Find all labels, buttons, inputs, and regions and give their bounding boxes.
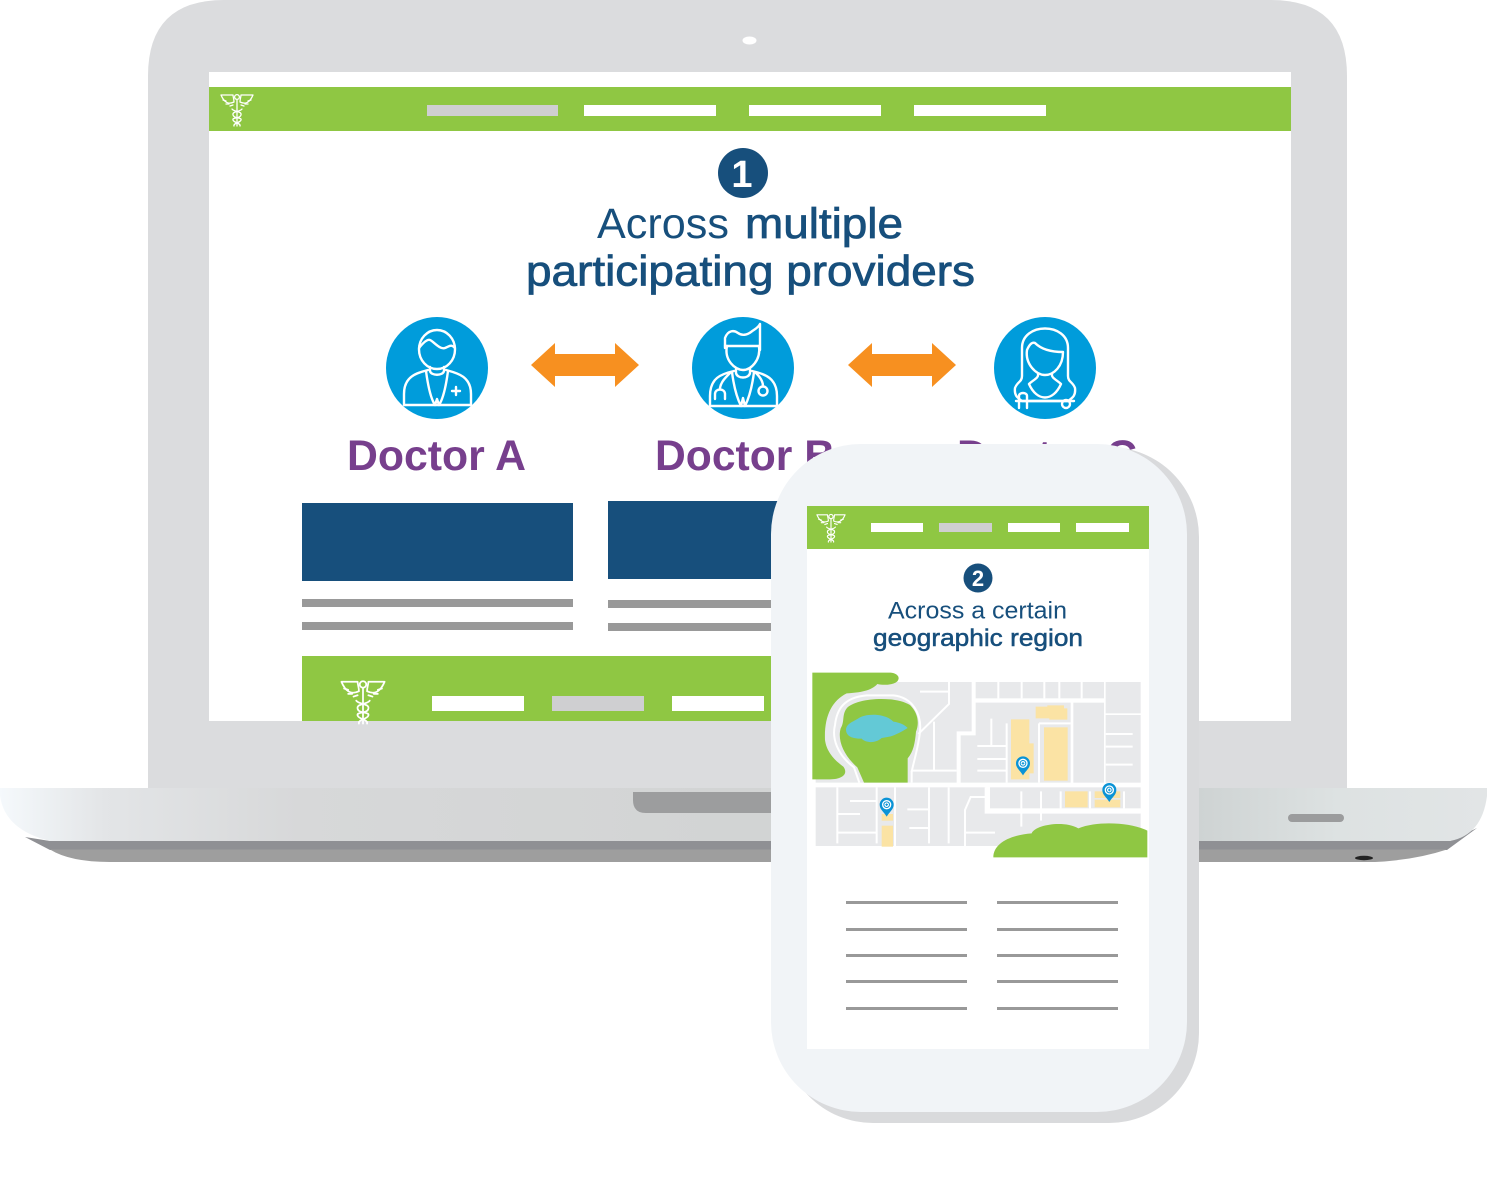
card: doctor A	[302, 503, 573, 630]
heading: across multiple participating providers: Across	[597, 200, 729, 248]
park: northwest	[812, 673, 899, 779]
base top	[0, 788, 1487, 841]
arrow: B to C	[848, 343, 956, 387]
doctor A icon	[386, 317, 488, 419]
phone site header bar	[807, 506, 1149, 549]
doctor labels: Doctor C	[957, 432, 1137, 480]
arrow: A to B	[531, 343, 639, 387]
number badge 2: 2	[972, 566, 984, 591]
map pin 2	[1102, 783, 1116, 802]
desktop site header bar	[209, 87, 1291, 131]
desktop site footer	[302, 656, 1182, 724]
doctor labels: Doctor A	[347, 432, 526, 480]
heading: across a certain geographic region: geographic region	[873, 625, 1083, 652]
map streets	[834, 682, 1141, 846]
footer logo	[341, 681, 385, 724]
map blocks	[816, 682, 1141, 846]
listing lines: left column	[846, 901, 967, 1010]
phone logo	[817, 514, 845, 542]
laptop screen	[209, 72, 1291, 721]
map buildings	[882, 705, 1120, 847]
heading: across multiple participating providers: multiple	[745, 200, 903, 248]
heading: across a certain geographic region: Across a certain	[888, 598, 1067, 624]
heading: across multiple participating providers: participating providers	[526, 248, 975, 296]
park: lake island	[840, 699, 918, 783]
park: southeast	[993, 823, 1147, 857]
doctor labels: Doctor B	[655, 432, 835, 480]
number badge 1: 1	[731, 154, 753, 196]
phone shadow	[783, 447, 1199, 1123]
heading: across a certain geographic region	[873, 598, 1083, 652]
speaker slot	[1288, 814, 1344, 822]
doctor B icon	[692, 317, 794, 419]
laptop base	[0, 788, 1487, 862]
port	[1355, 856, 1373, 860]
phone body	[771, 444, 1187, 1112]
trackpad notch	[633, 792, 860, 813]
map	[812, 673, 1147, 857]
map pin 3	[880, 798, 894, 817]
phone screen	[807, 506, 1149, 1049]
map pin 1	[1016, 756, 1030, 775]
phone	[771, 444, 1199, 1123]
card: doctor B	[608, 501, 879, 631]
number badge 1	[718, 148, 768, 198]
base underside	[25, 828, 1477, 850]
logo: caduceus	[221, 95, 253, 126]
camera	[742, 36, 756, 44]
number badge 2	[964, 564, 992, 592]
listing lines: right column	[997, 901, 1118, 1010]
doctor C icon	[994, 317, 1096, 419]
lake	[846, 715, 908, 742]
heading: across multiple participating providers	[526, 200, 975, 296]
doctor labels	[347, 432, 1137, 480]
laptop lid	[148, 0, 1347, 790]
